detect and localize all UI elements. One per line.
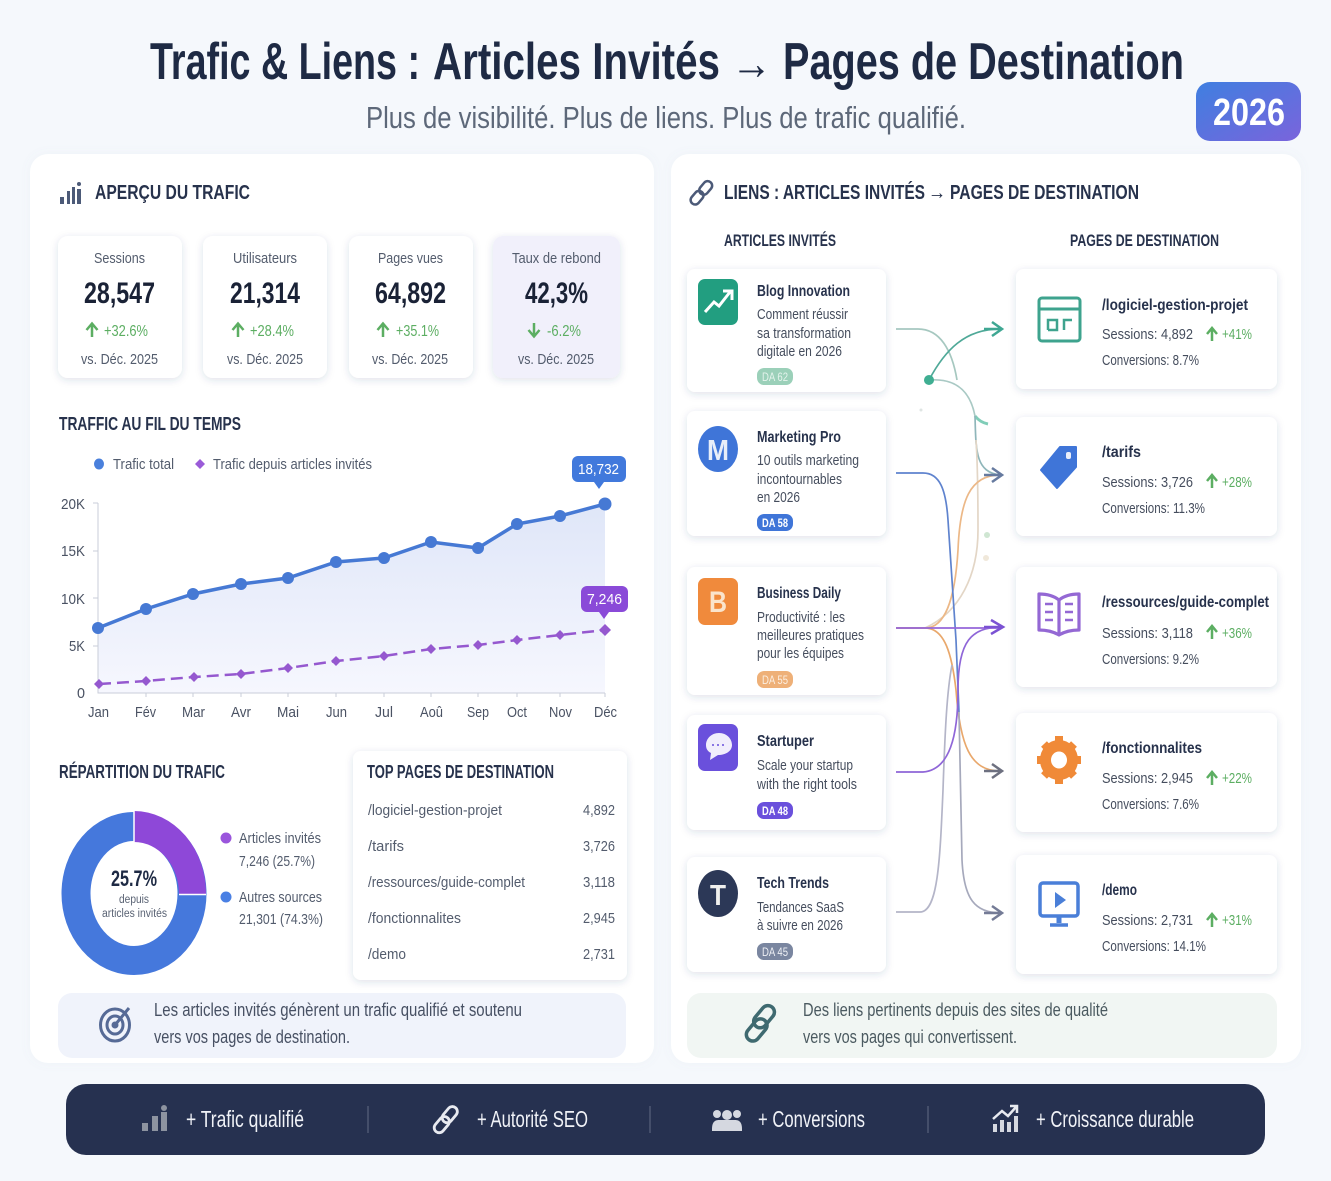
heading: aperçu du trafic: APERÇU DU TRAFIC [95, 182, 250, 204]
icon: speech bubble [698, 724, 738, 771]
page card: tarifs: /tarifs [1102, 444, 1141, 461]
panel: links [671, 154, 1301, 1063]
heading: traffic over time: TRAFFIC AU FIL DU TEMPS [59, 414, 241, 434]
axis labels: Avr [231, 704, 251, 721]
faint specks [920, 408, 990, 561]
icon: gear [1037, 736, 1081, 784]
page card: demo [1016, 855, 1277, 974]
KPI card: bounce rate: vs. Déc. 2025 [518, 351, 594, 368]
article card: Business Daily [687, 567, 886, 695]
donut legend: 21,301 (74.3%) [239, 911, 323, 928]
KPI card: sessions: vs. Déc. 2025 [81, 351, 158, 368]
panel: traffic overview [30, 154, 654, 1063]
connector dot [924, 375, 934, 385]
page card: fonctionnalites: Conversions: 7.6% [1102, 797, 1199, 813]
KPI card: users: Utilisateurs [233, 250, 297, 267]
heading: links: PAGES DE DESTINATION [950, 182, 1139, 204]
article card: Blog Innovation: digitale en 2026 [757, 344, 842, 360]
icon: target [100, 1008, 130, 1041]
page card: ressources: Sessions: 3,118 [1102, 626, 1193, 642]
article card: Tech Trends: à suivre en 2026 [757, 918, 843, 934]
page card: tarifs: Conversions: 11.3% [1102, 501, 1205, 517]
callout: 18,732 [572, 456, 626, 489]
axis labels: Déc [594, 704, 617, 721]
page card: fonctionnalites: /fonctionnalites [1102, 740, 1202, 757]
page card: demo: /demo [1102, 882, 1137, 899]
article card: Startuper: DA 48 [762, 806, 788, 818]
article card: Marketing Pro: 10 outils marketing [757, 453, 859, 469]
icon: chain link [689, 179, 714, 206]
callout: quality links [687, 993, 1277, 1058]
callout: quality links: Des liens pertinents depuis des sites de qualité [803, 1000, 1108, 1020]
article card: Blog Innovation: DA 62 [762, 372, 788, 384]
axis labels [61, 496, 617, 721]
KPI card: users: 21,314 [230, 277, 300, 310]
KPI card: page views: vs. Déc. 2025 [372, 351, 448, 368]
callout: guest articles: vers vos pages de destination. [154, 1027, 350, 1047]
donut chart: articles invités [102, 908, 167, 920]
icon: video screen [1040, 883, 1078, 925]
page card: tarifs [1016, 417, 1277, 536]
axis labels: Sep [467, 704, 489, 721]
icon: people [712, 1110, 742, 1131]
callout: quality links: vers vos pages qui convertissent. [803, 1027, 1017, 1047]
callout: 7,246: 7,246 [587, 591, 622, 608]
KPI card: page views: 64,892 [375, 277, 446, 310]
top landing pages card: TOP PAGES DE DESTINATION [367, 762, 554, 782]
KPI card: bounce rate: 42,3% [525, 277, 588, 310]
top landing pages card: /logiciel-gestion-projet [368, 802, 503, 819]
article card: Business Daily: Productivité : les [757, 610, 845, 626]
article card: Business Daily: Business Daily [757, 585, 841, 602]
page card: ressources: Conversions: 9.2% [1102, 652, 1199, 668]
article card: Business Daily: pour les équipes [757, 646, 844, 662]
page card: logiciel-gestion-projet: Conversions: 8.7% [1102, 353, 1199, 369]
axis labels: Jan [88, 704, 109, 721]
donut chart: depuis [119, 894, 149, 906]
heading: répartition: RÉPARTITION DU TRAFIC [59, 761, 225, 782]
icon: M [698, 426, 738, 472]
axis labels: Aoû [420, 704, 443, 721]
year badge [1196, 82, 1301, 141]
callout: guest articles: Les articles invités génèrent un trafic qualifié et soutenu [154, 1000, 522, 1020]
page card: ressources [1016, 567, 1277, 687]
chart legend [94, 456, 372, 473]
column heading: guest articles: ARTICLES INVITÉS [724, 231, 836, 250]
page card: demo: Conversions: 14.1% [1102, 939, 1206, 955]
article card: Startuper: Startuper [757, 733, 814, 750]
icon: growth chart [993, 1106, 1018, 1132]
benefit: croissance: + Croissance durable [1036, 1106, 1194, 1132]
axis labels: Mai [277, 704, 299, 721]
icon: price tag [1041, 447, 1076, 488]
top landing pages card: /fonctionnalites [368, 910, 461, 927]
title: Pages de Destination [783, 33, 1184, 91]
axis labels: Fév [135, 704, 156, 721]
page card: demo: +31% [1222, 913, 1252, 929]
top landing pages card: 4,892 [583, 802, 615, 819]
axis labels: 0 [77, 685, 85, 702]
benefit: autorité: + Autorité SEO [477, 1106, 588, 1132]
article card: Tech Trends: Tendances SaaS [757, 900, 844, 916]
article card: Business Daily: meilleures pratiques [757, 628, 864, 644]
subtitle: Plus de visibilité. Plus de liens. Plus de trafic qualifié. [366, 100, 966, 135]
axis labels: Jun [326, 704, 347, 721]
KPI card: page views: Pages vues [378, 250, 443, 267]
article card: Blog Innovation: Blog Innovation [757, 283, 850, 300]
article card: Marketing Pro [687, 411, 886, 536]
icon: bars [142, 1105, 167, 1131]
donut legend: Autres sources [239, 889, 322, 906]
KPI card: users: vs. Déc. 2025 [227, 351, 303, 368]
KPI card: users [203, 236, 327, 378]
top landing pages card: /tarifs [368, 838, 404, 855]
article card: Tech Trends: DA 45 [762, 947, 788, 959]
article card: Blog Innovation [687, 269, 886, 392]
icon: chain link green [744, 1003, 777, 1044]
page card: fonctionnalites [1016, 713, 1277, 832]
icon: open book [1039, 594, 1079, 635]
icon: dashboard [1039, 298, 1080, 341]
top landing pages card: /demo [368, 946, 406, 963]
page card: tarifs: Sessions: 3,726 [1102, 475, 1193, 491]
icon: T: T [710, 880, 726, 912]
top landing pages card [353, 751, 627, 980]
article card: Marketing Pro: Marketing Pro [757, 429, 841, 446]
page card: logiciel-gestion-projet: Sessions: 4,892 [1102, 327, 1193, 343]
article card: Startuper: Scale your startup [757, 758, 853, 774]
KPI card: users: +28.4% [250, 323, 294, 340]
KPI card: bounce rate [493, 236, 620, 378]
arrowheads [984, 322, 1003, 920]
article card: Startuper [687, 715, 886, 830]
article card: Tech Trends: Tech Trends [757, 875, 829, 892]
KPI card: sessions: Sessions [94, 250, 145, 267]
benefit: trafic: + Trafic qualifié [186, 1106, 304, 1132]
axis labels: Oct [507, 704, 528, 721]
article card: Blog Innovation: Comment réussir [757, 307, 848, 323]
footer bar [66, 1084, 1265, 1155]
heading: links: LIENS : ARTICLES INVITÉS [724, 181, 925, 204]
axis labels: 10K [61, 591, 85, 608]
title [150, 33, 1184, 91]
page card: fonctionnalites: +22% [1222, 771, 1252, 787]
page card: tarifs: +28% [1222, 475, 1252, 491]
top landing pages card: 3,118 [583, 874, 615, 891]
donut chart [76, 811, 206, 960]
icon: T [698, 870, 738, 917]
KPI card: page views: +35.1% [396, 323, 439, 340]
page card: logiciel-gestion-projet [1016, 269, 1277, 389]
year badge: 2026 [1213, 92, 1285, 134]
article card: Business Daily: DA 55 [762, 675, 788, 687]
chart legend: Trafic total [113, 456, 174, 473]
icon: B [698, 578, 738, 625]
axis labels: Jul [375, 704, 393, 721]
callout: 7,246 [581, 586, 628, 619]
axis labels: 20K [61, 496, 85, 513]
line chart [61, 456, 628, 721]
column heading: landing pages: PAGES DE DESTINATION [1070, 232, 1219, 250]
axis labels: 15K [61, 543, 85, 560]
chart legend: Trafic depuis articles invités [213, 456, 372, 473]
donut chart: 25.7% [111, 866, 157, 891]
donut legend: 7,246 (25.7%) [239, 853, 315, 870]
icon: bars [60, 182, 81, 204]
top landing pages card: 3,726 [583, 838, 615, 855]
callout: guest articles [58, 993, 626, 1058]
article card: Startuper: with the right tools [756, 777, 857, 793]
connector curves [896, 329, 1000, 913]
donut legend: Articles invités [239, 830, 321, 847]
page card: demo: Sessions: 2,731 [1102, 913, 1193, 929]
KPI card: sessions [58, 236, 182, 378]
article card: Blog Innovation: sa transformation [757, 326, 851, 342]
KPI card: bounce rate: -6.2% [547, 323, 581, 340]
heading: links: → [928, 182, 946, 204]
page card: logiciel-gestion-projet: +41% [1222, 327, 1252, 343]
icon: link [432, 1105, 459, 1135]
heading: links [724, 181, 1139, 204]
page card: fonctionnalites: Sessions: 2,945 [1102, 771, 1193, 787]
top landing pages card: 2,731 [583, 946, 615, 963]
icon: M: M [707, 435, 729, 467]
axis labels: 5K [69, 638, 85, 655]
page card: logiciel-gestion-projet: /logiciel-gestion-projet [1102, 297, 1249, 314]
article card: Marketing Pro: en 2026 [757, 490, 800, 506]
article card: Tech Trends [687, 857, 886, 972]
icon: B: B [709, 586, 727, 619]
page card: ressources: +36% [1222, 626, 1252, 642]
axis labels: Mar [182, 704, 205, 721]
title: → [731, 37, 772, 89]
icon: trend [698, 279, 738, 325]
top landing pages card: 2,945 [583, 910, 615, 927]
top landing pages card: /ressources/guide-complet [368, 874, 526, 891]
KPI card: sessions: +32.6% [104, 323, 148, 340]
article card: Marketing Pro: incontournables [757, 472, 842, 488]
KPI card: bounce rate: Taux de rebond [512, 250, 601, 267]
callout: 18,732: 18,732 [578, 461, 619, 478]
donut legend [220, 830, 323, 928]
title: Articles Invités [433, 33, 720, 91]
article card: Marketing Pro: DA 58 [762, 518, 788, 530]
benefit: conversions: + Conversions [758, 1106, 865, 1132]
axis labels: Nov [549, 704, 572, 721]
KPI card: page views [349, 236, 473, 378]
title: Trafic & Liens : [150, 33, 420, 91]
KPI card: sessions: 28,547 [84, 277, 155, 310]
page card: ressources: /ressources/guide-complet [1102, 594, 1270, 611]
